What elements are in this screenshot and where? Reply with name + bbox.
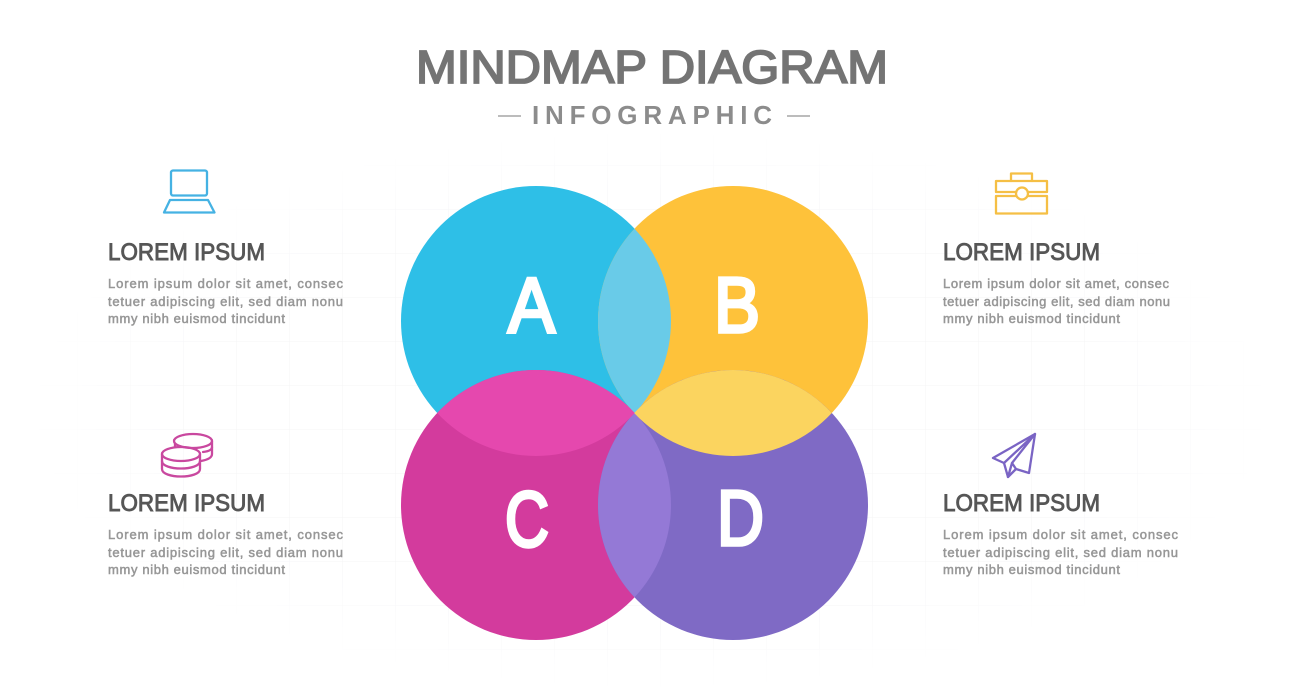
body text: Lorem ipsum dolor sit amet, consec (943, 276, 1170, 291)
heading: LOREM IPSUM (108, 490, 265, 517)
body text: tetuer adipiscing elit, sed diam nonu (108, 294, 343, 309)
icon: coins (162, 434, 212, 476)
venn diagram (401, 186, 868, 640)
icon: paper plane (993, 434, 1035, 477)
panel: top left (108, 170, 344, 326)
body text: Lorem ipsum dolor sit amet, consec (943, 527, 1178, 542)
letter B: B (714, 261, 760, 349)
body text (943, 276, 1170, 326)
body text: Lorem ipsum dolor sit amet, consec (108, 276, 344, 291)
letter A: A (508, 261, 555, 349)
heading: LOREM IPSUM (943, 490, 1100, 517)
icon: laptop (164, 170, 214, 212)
heading: LOREM IPSUM (943, 239, 1100, 266)
overlap A and B (598, 229, 671, 413)
body text: mmy nibh euismod tincidunt (108, 311, 285, 326)
subtitle: INFOGRAPHIC (532, 100, 772, 130)
panel: top right (943, 174, 1170, 326)
circle A (401, 186, 671, 456)
body text (108, 527, 344, 577)
panel: bottom right (943, 434, 1178, 577)
body text (108, 276, 344, 326)
letter D: D (717, 474, 764, 562)
body text: mmy nibh euismod tincidunt (943, 311, 1120, 326)
body text: mmy nibh euismod tincidunt (108, 562, 285, 577)
heading: LOREM IPSUM (108, 239, 265, 266)
overlap C and D (598, 413, 671, 597)
overlap B and D (634, 370, 832, 456)
body text: tetuer adipiscing elit, sed diam nonu (943, 545, 1178, 560)
body text: Lorem ipsum dolor sit amet, consec (108, 527, 344, 542)
body text: mmy nibh euismod tincidunt (943, 562, 1120, 577)
icon: briefcase (996, 174, 1047, 214)
circle B (598, 186, 868, 456)
overlap A and C (437, 370, 635, 456)
circle D (598, 370, 868, 640)
body text: tetuer adipiscing elit, sed diam nonu (108, 545, 343, 560)
title: MINDMAP DIAGRAM (416, 41, 888, 93)
letter C: C (505, 475, 549, 563)
panel: bottom left (108, 434, 344, 577)
body text (943, 527, 1178, 577)
body text: tetuer adipiscing elit, sed diam nonu (943, 294, 1170, 309)
circle C (401, 370, 671, 640)
